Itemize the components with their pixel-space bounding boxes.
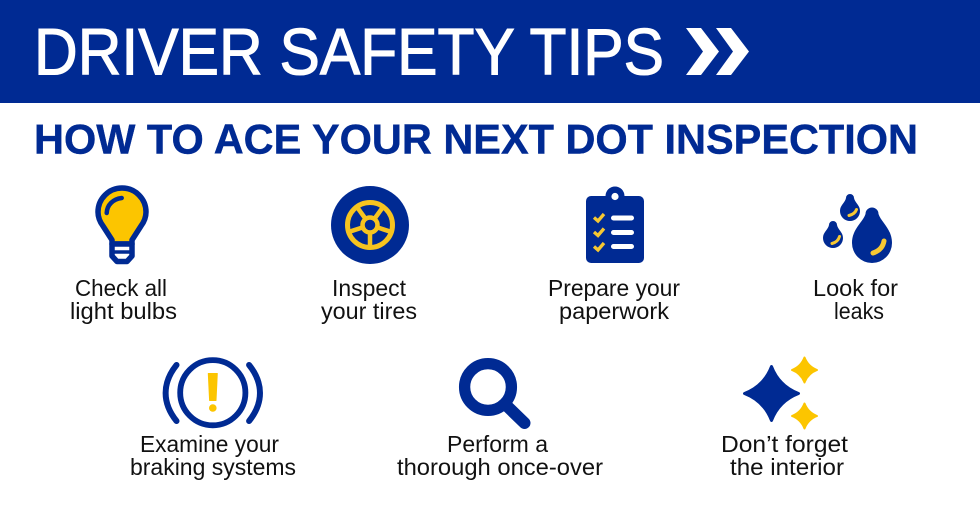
- tip: perform a thorough once-over: [397, 364, 603, 480]
- icon: oil drops: [823, 194, 892, 263]
- label: check all light bulbs: light bulbs: [70, 298, 177, 324]
- label: perform a thorough once-over: thorough once-over: [397, 454, 603, 480]
- label: inspect your tires: Inspect: [332, 275, 406, 301]
- tip: don't forget the interior: [721, 358, 848, 480]
- label: don't forget the interior: Don’t forget: [721, 431, 848, 457]
- label: don't forget the interior: the interior: [730, 454, 844, 480]
- subtitle: HOW TO ACE YOUR NEXT DOT INSPECTION: [34, 116, 918, 162]
- label: look for leaks: Look for: [813, 275, 898, 301]
- tip: examine your braking systems: [130, 360, 296, 480]
- label: prepare your paperwork: paperwork: [559, 298, 669, 324]
- label: look for leaks: leaks: [834, 298, 884, 324]
- label: inspect your tires: your tires: [321, 298, 417, 324]
- icon: tire: [331, 186, 409, 264]
- icon: magnifying glass: [465, 364, 524, 423]
- label: perform a thorough once-over: Perform a: [447, 431, 549, 457]
- tip: check all light bulbs: [70, 188, 177, 324]
- header banner: [0, 0, 980, 103]
- label: examine your braking systems: braking systems: [130, 454, 296, 480]
- label: prepare your paperwork: Prepare your: [548, 275, 680, 301]
- icon: light bulb: [98, 188, 146, 262]
- tip: inspect your tires: [321, 186, 417, 324]
- icon: double chevron arrow: [686, 28, 749, 75]
- label: check all light bulbs: Check all: [75, 275, 167, 301]
- icon: sparkles: [744, 358, 817, 428]
- icon: clipboard: [586, 186, 644, 263]
- tip: look for leaks: [813, 194, 898, 324]
- label: examine your braking systems: Examine your: [140, 431, 279, 457]
- tip: prepare your paperwork: [548, 186, 680, 324]
- icon: brake warning: [166, 360, 260, 425]
- title: DRIVER SAFETY TIPS: [34, 14, 664, 88]
